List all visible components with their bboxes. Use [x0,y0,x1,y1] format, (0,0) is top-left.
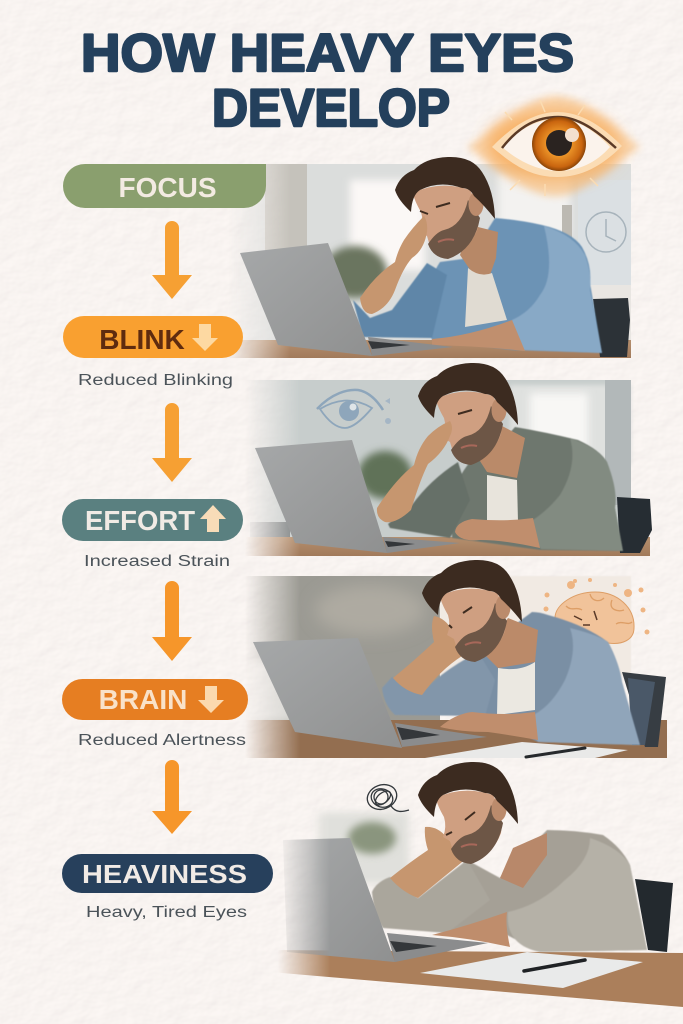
pill: effort [62,499,243,541]
chair [622,672,666,747]
caption: heavy, tired eyes: Heavy, Tired Eyes [86,904,247,921]
laptop [240,243,453,356]
icon: up arrow [200,505,226,532]
scene 3 office background [245,576,667,758]
left arm and hand [377,421,452,522]
icon: orange eye [467,96,640,196]
laptop [255,440,460,553]
left arm and hand [390,827,467,898]
pill: heaviness [62,854,273,893]
pill: blink: BLINK [99,324,185,355]
pill: heaviness: HEAVINESS [82,859,247,889]
left arm and hand [393,616,468,695]
panel: scene 1 man rubbing eyes at laptop [228,157,631,358]
man 3 hoodie [382,612,640,745]
closed eye lines [420,203,450,214]
icon: scribble [364,781,409,813]
arrow: blink to effort [152,403,192,482]
scene 4 background plant and table [270,812,683,1007]
man 1 shirt [353,218,602,353]
laptop [283,838,488,962]
scene 2 office background [245,380,650,556]
closed eye lines [446,812,475,835]
title: HOW HEAVY EYES [81,24,574,83]
head [418,363,518,465]
pill: blink [63,316,243,358]
neck [485,618,538,668]
tee [497,662,535,715]
arrow: effort to brain [152,581,192,661]
panel: scene 4 man nearly asleep [270,762,683,1007]
head [422,560,522,662]
neck [478,426,525,478]
closed eye lines [458,410,472,414]
icon: down arrow [198,686,224,713]
pill: focus: FOCUS [118,172,216,203]
pill: brain [62,679,248,720]
right forearm [432,320,525,351]
scene 1 office background [228,164,631,358]
neck [460,225,498,277]
title [81,24,574,138]
man 2 shirt [388,427,623,551]
chair [617,497,652,553]
chair [593,298,630,357]
forearm [432,912,510,947]
paper and pen [425,742,628,758]
arrow: brain to heaviness [152,760,192,834]
right forearm [440,712,538,740]
neck [500,833,547,888]
arrow: focus to blink [152,221,192,299]
tee [487,475,518,523]
paper and pen [420,952,643,988]
tee [465,268,507,327]
laptop [253,638,487,748]
caption: reduced blinking: Reduced Blinking [78,372,233,389]
title: DEVELOP [212,79,450,138]
pill: effort: EFFORT [85,505,195,536]
pill: brain: BRAIN [99,684,187,715]
pill: focus [63,164,266,208]
chair [635,879,673,952]
left arm and hand [360,216,427,314]
head [395,157,495,259]
head [418,762,518,864]
caption: increased strain: Increased Strain [84,553,230,570]
right forearm [455,518,540,548]
panel: scene 3 man head resting on hand [245,560,667,758]
caption: reduced alertness: Reduced Alertness [78,732,246,749]
icon: faded eye [317,390,391,428]
closed eye lines [449,607,472,628]
man 4 sweater [372,830,647,952]
icon: tired brain [544,578,650,643]
panel: scene 2 man pinching nose [245,363,652,556]
icon: down arrow [192,324,218,351]
